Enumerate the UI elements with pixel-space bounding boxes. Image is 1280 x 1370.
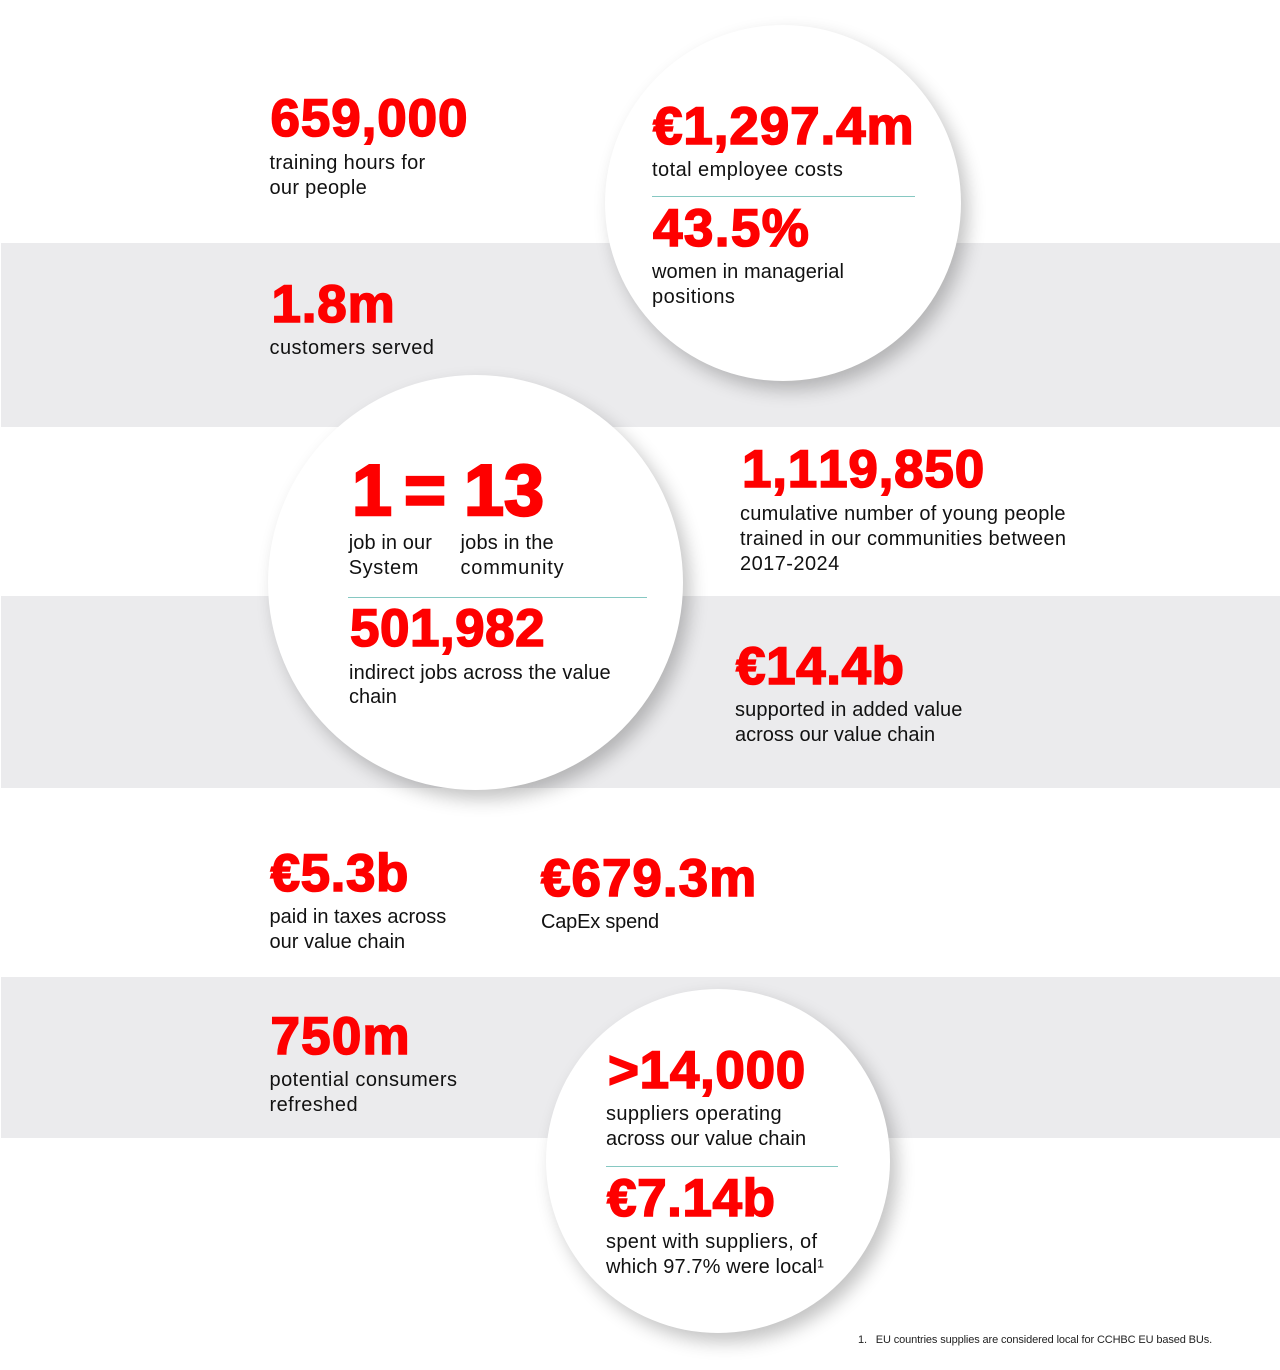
stat: supplier spend: which 97.7% were local¹	[606, 1256, 824, 1278]
stat: supplier spend: €7.14b	[607, 1169, 776, 1228]
stat: young people trained	[740, 440, 1066, 575]
stat: training hours: our people	[270, 177, 367, 199]
stat: suppliers: across our value chain	[606, 1128, 806, 1150]
panel: jobs circle	[268, 375, 683, 790]
stat: supplier spend	[606, 1169, 824, 1278]
stat: customers served	[270, 275, 434, 359]
stat: suppliers	[606, 1041, 806, 1150]
stat: taxes	[270, 844, 446, 953]
stat: added value	[735, 637, 962, 746]
stat: training hours: 659,000	[270, 89, 468, 148]
stat: job multiplier: job in our	[349, 532, 432, 554]
stat: indirect jobs	[349, 599, 611, 708]
stat: young people trained: 2017-2024	[740, 553, 840, 575]
stat: employee costs: total employee costs	[652, 159, 843, 181]
stat: potential consumers	[270, 1007, 457, 1116]
stat: women in managerial positions: women in managerial	[652, 261, 844, 283]
stat: job multiplier: jobs in the	[460, 532, 554, 554]
band: grey row 3	[1, 977, 1280, 1138]
stat: potential consumers: 750m	[270, 1007, 411, 1066]
stat: employee costs: €1,297.4m	[653, 97, 915, 156]
stat: young people trained: 1,119,850	[742, 440, 985, 499]
stat: taxes: €5.3b	[270, 844, 409, 903]
stat: training hours: training hours for	[270, 152, 426, 174]
stat: job multiplier: =	[404, 451, 446, 531]
stat: taxes: our value chain	[270, 931, 405, 953]
stat: customers served: 1.8m	[272, 275, 396, 334]
footnote: 1. EU countries supplies are considered local for CCHBC EU based BUs.	[858, 1334, 1212, 1346]
stat: job multiplier: 13	[464, 451, 544, 531]
band: grey row 2	[1, 596, 1280, 788]
stat: capex: €679.3m	[541, 849, 757, 908]
stat: job multiplier: 1	[352, 451, 392, 531]
stat: supplier spend: spent with suppliers, of	[606, 1231, 817, 1253]
stat: customers served: customers served	[270, 337, 434, 359]
stat: taxes: paid in taxes across	[270, 906, 446, 928]
stat: women in managerial positions	[652, 199, 844, 308]
stat: young people trained: cumulative number of young people	[740, 503, 1066, 525]
stat: training hours	[270, 89, 468, 199]
stat: added value: across our value chain	[735, 724, 935, 746]
panel: suppliers circle	[546, 989, 890, 1333]
band: grey row 1	[1, 243, 1280, 427]
stat: job multiplier	[348, 451, 564, 579]
stat: job multiplier: System	[349, 557, 419, 579]
stat: indirect jobs: chain	[349, 686, 397, 708]
stat: women in managerial positions: 43.5%	[653, 199, 810, 258]
stat: potential consumers: potential consumers	[270, 1069, 457, 1091]
panel: employee circle	[605, 25, 961, 381]
stat: added value: supported in added value	[735, 699, 962, 721]
stat: indirect jobs: indirect jobs across the value	[349, 662, 611, 684]
stat: added value: €14.4b	[736, 637, 905, 696]
stat: capex: CapEx spend	[541, 911, 659, 933]
stat: potential consumers: refreshed	[270, 1094, 358, 1116]
stat: indirect jobs: 501,982	[350, 599, 545, 658]
stat: capex	[540, 849, 757, 933]
stat: women in managerial positions: positions	[652, 286, 735, 308]
stat: job multiplier: community	[460, 557, 564, 579]
stat: employee costs	[652, 97, 915, 181]
stat: young people trained: trained in our communities between	[740, 528, 1066, 550]
stat: suppliers: suppliers operating	[606, 1103, 782, 1125]
stat: suppliers: >14,000	[608, 1041, 806, 1100]
